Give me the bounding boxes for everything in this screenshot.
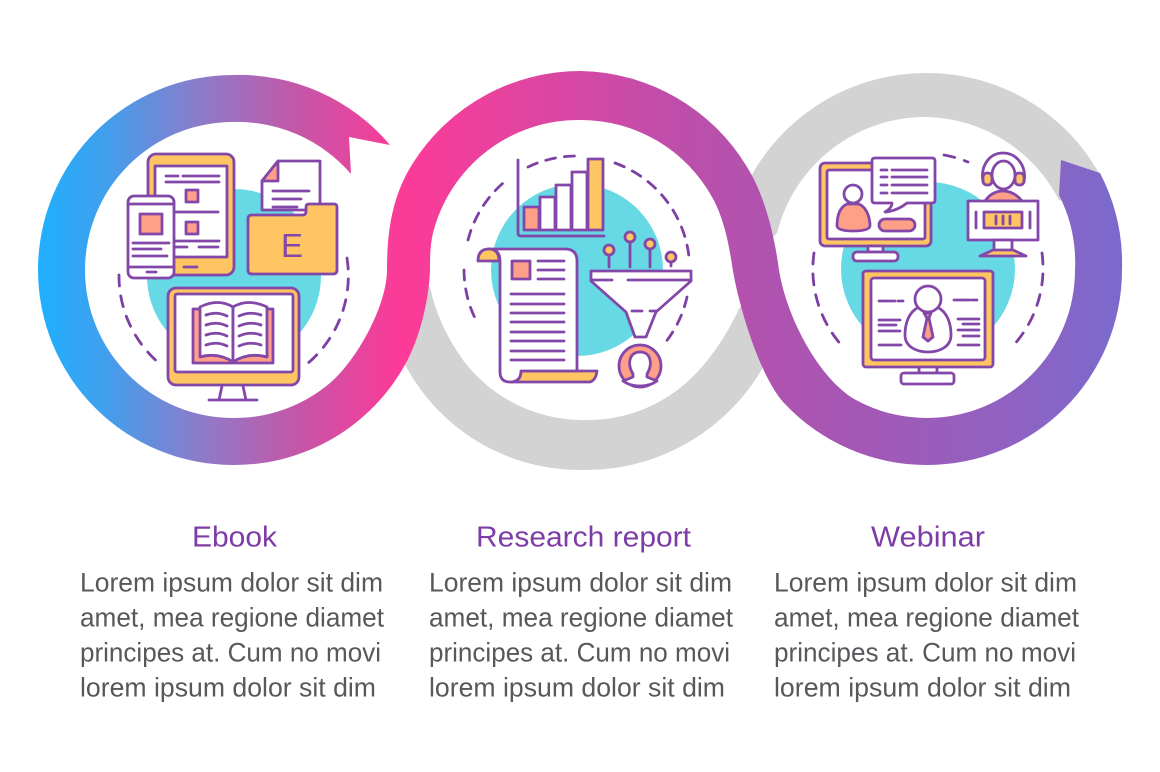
heading: Ebook: Ebook bbox=[192, 522, 278, 554]
text block: webinar description: lorem ipsum dolor sit dim bbox=[774, 672, 1071, 702]
icon: document bbox=[262, 161, 320, 210]
icon: presenter with headset at desk bbox=[968, 153, 1038, 256]
icon: paper scroll bbox=[478, 249, 597, 382]
text block: webinar description: amet, mea regione diamet bbox=[774, 602, 1080, 632]
text block: webinar description: Lorem ipsum dolor sit dim bbox=[774, 568, 1077, 598]
icon group: research report bbox=[464, 156, 691, 387]
dashed ring bbox=[119, 258, 348, 364]
dashed ring bbox=[813, 155, 1043, 348]
icon: folder with E: E bbox=[281, 227, 303, 264]
icon: user avatar bbox=[619, 345, 661, 387]
text block: webinar description bbox=[774, 568, 1080, 702]
text block: ebook description: Lorem ipsum dolor sit dim bbox=[80, 568, 383, 598]
text block: research report description: lorem ipsum dolor sit dim bbox=[429, 672, 725, 702]
icon: video call monitor with speech bubble bbox=[820, 158, 935, 261]
ribbon: gradient arrow band bbox=[38, 71, 1122, 465]
column: research report bbox=[429, 522, 734, 702]
heading: Webinar: Webinar bbox=[871, 522, 985, 554]
column: webinar bbox=[774, 522, 1080, 702]
teal backdrop circle bbox=[841, 182, 1015, 356]
text block: research report description: principes at. Cum no movi bbox=[429, 638, 730, 668]
icon: large monitor with speaker bbox=[863, 271, 993, 384]
text block: webinar description: principes at. Cum no movi bbox=[774, 638, 1076, 668]
icon group: webinar bbox=[813, 153, 1043, 384]
icon group: ebook bbox=[119, 154, 348, 400]
ribbon: gray lower loop behind research report bbox=[398, 285, 766, 470]
text block: ebook description: amet, mea regione diamet bbox=[80, 602, 385, 632]
teal backdrop circle bbox=[491, 184, 663, 356]
text block: ebook description: lorem ipsum dolor sit dim bbox=[80, 672, 376, 702]
icon: funnel with pins bbox=[591, 232, 691, 337]
text block: research report description: Lorem ipsum dolor sit dim bbox=[429, 568, 732, 598]
icon: desktop monitor with open book bbox=[168, 288, 299, 400]
icon: folder with E bbox=[248, 204, 337, 274]
bar chart bbox=[518, 159, 604, 236]
icon: tablet bbox=[148, 154, 234, 275]
ribbon: gray upper loop behind webinar bbox=[749, 73, 1100, 240]
teal backdrop circle bbox=[147, 189, 321, 363]
dashed ring bbox=[464, 156, 689, 343]
text block: ebook description bbox=[80, 568, 385, 702]
text block: research report description bbox=[429, 568, 734, 702]
heading: Research report: Research report bbox=[476, 522, 691, 554]
text block: research report description: amet, mea regione diamet bbox=[429, 602, 734, 632]
icon: smartphone bbox=[128, 196, 174, 278]
text block: ebook description: principes at. Cum no movi bbox=[80, 638, 381, 668]
column: ebook bbox=[80, 522, 385, 702]
